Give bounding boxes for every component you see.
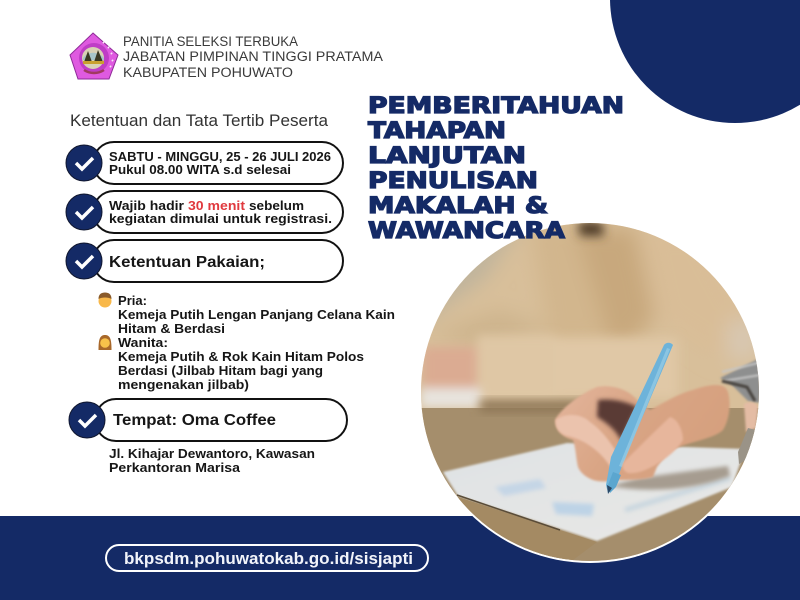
title: MAKALAH &	[368, 193, 548, 219]
venue address: Jl. Kihajar Dewantoro, Kawasan	[109, 446, 315, 461]
icon: check	[66, 194, 102, 230]
dress code for women: Wanita:	[118, 335, 168, 350]
website link pill	[106, 545, 428, 571]
hand	[555, 385, 730, 482]
organizer heading: KABUPATEN POHUWATO	[123, 65, 293, 80]
dress code for women	[118, 335, 364, 392]
item: venue	[69, 399, 347, 441]
icon: check	[69, 402, 105, 438]
title: TAHAPAN	[368, 118, 506, 144]
item: arrival time: 30 menit	[188, 198, 246, 213]
logo: Kabupaten Pohuwato emblem	[70, 33, 118, 79]
item: dress code	[66, 240, 343, 282]
dress code for men: Pria:	[118, 293, 147, 308]
dark finger gap	[597, 399, 637, 441]
section heading: Ketentuan dan Tata Tertib Peserta	[70, 112, 329, 130]
item: date and time: Pukul 08.00 WITA s.d selesai	[109, 162, 291, 177]
dress code for women: Kemeja Putih & Rok Kain Hitam Polos	[118, 349, 364, 364]
dress code for men: Kemeja Putih Lengan Panjang Celana Kain	[118, 307, 395, 322]
icon: check	[66, 145, 102, 181]
dress code for women: mengenakan jilbab)	[118, 377, 249, 392]
title: LANJUTAN	[368, 143, 526, 169]
item: arrival time: kegiatan dimulai untuk registrasi.	[109, 211, 332, 226]
organizer heading: PANITIA SELEKSI TERBUKA	[123, 34, 298, 49]
photo: hand writing on paper	[415, 218, 765, 572]
paper	[443, 443, 745, 541]
striped sleeve	[720, 358, 760, 403]
item: arrival time: Wajib hadir	[109, 198, 184, 213]
thumb	[623, 417, 683, 473]
item: dress code: Ketentuan Pakaian;	[109, 254, 265, 271]
item: arrival time: sebelum	[249, 198, 304, 213]
item: arrival time	[66, 191, 343, 233]
top finger	[555, 414, 615, 466]
decorative navy circle top right	[610, 0, 800, 123]
item: venue: Tempat: Oma Coffee	[113, 412, 276, 429]
organizer heading: JABATAN PIMPINAN TINGGI PRATAMA	[123, 49, 383, 64]
icon: check	[66, 243, 102, 279]
website link pill: bkpsdm.pohuwatokab.go.id/sisjapti	[124, 549, 413, 568]
footer band	[0, 516, 800, 600]
dress code for men: Hitam & Berdasi	[118, 321, 225, 336]
title: PENULISAN	[368, 168, 538, 194]
venue address: Perkantoran Marisa	[109, 460, 241, 475]
icon: woman emoji	[98, 335, 112, 350]
table	[415, 408, 760, 568]
title: PEMBERITAHUAN	[368, 93, 624, 119]
item: date and time	[66, 142, 343, 184]
dress code for men	[118, 293, 395, 336]
far wrist and watch	[744, 402, 758, 432]
organizer heading	[123, 34, 383, 80]
dress code for women: Berdasi (Jilbab Hitam bagi yang	[118, 363, 323, 378]
title	[368, 93, 624, 244]
venue address	[109, 446, 315, 475]
paper shadow	[610, 466, 730, 490]
icon: man emoji	[98, 292, 112, 308]
item: date and time: SABTU - MINGGU, 25 - 26 JULI 2026	[109, 149, 331, 164]
pen	[606, 343, 673, 493]
title: WAWANCARA	[368, 218, 566, 244]
